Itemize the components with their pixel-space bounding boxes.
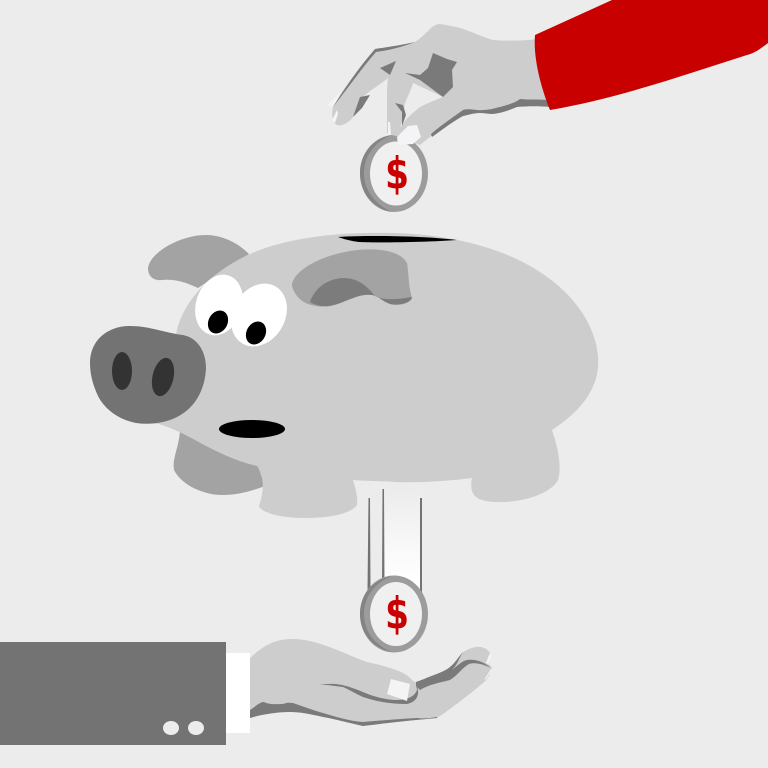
icon: coin slot <box>338 236 457 242</box>
icon: pig near ear <box>292 249 412 307</box>
icon: pig body <box>155 233 598 518</box>
wrist and arm shadow <box>431 99 550 137</box>
icon: lower hand with shirt cuff and sleeve <box>0 639 492 745</box>
fingernails <box>484 653 492 680</box>
palm shadow <box>405 53 457 97</box>
back finger outline <box>333 42 415 107</box>
icon: falling coin motion lines <box>368 489 422 595</box>
red sleeve <box>535 0 768 110</box>
icon: upper hand holding coin <box>328 0 768 145</box>
palm shadow <box>250 702 437 726</box>
icon: pig far ear <box>148 235 249 288</box>
icon: pig mouth <box>219 420 285 438</box>
finger crease <box>416 652 491 690</box>
thumbnail <box>387 679 410 701</box>
icon: pig snout <box>90 326 206 424</box>
shirt cuff <box>226 653 250 733</box>
sleeve buttons <box>163 721 179 735</box>
icon: pig eyes <box>188 268 298 357</box>
palm crease and thumb outline <box>316 684 418 704</box>
dollar sign: $ <box>385 148 409 199</box>
dollar sign: $ <box>385 588 409 639</box>
icon: pig back-left leg <box>174 430 265 495</box>
hand <box>332 24 550 145</box>
icon: falling dollar coin <box>360 576 428 652</box>
icon: upper dollar coin <box>360 135 428 212</box>
suit sleeve <box>0 642 226 745</box>
lower hand <box>250 639 492 726</box>
finger creases <box>353 61 406 126</box>
fingernails <box>328 92 391 135</box>
thumbnail <box>397 125 421 145</box>
gap between fingers and thumb <box>400 83 443 128</box>
